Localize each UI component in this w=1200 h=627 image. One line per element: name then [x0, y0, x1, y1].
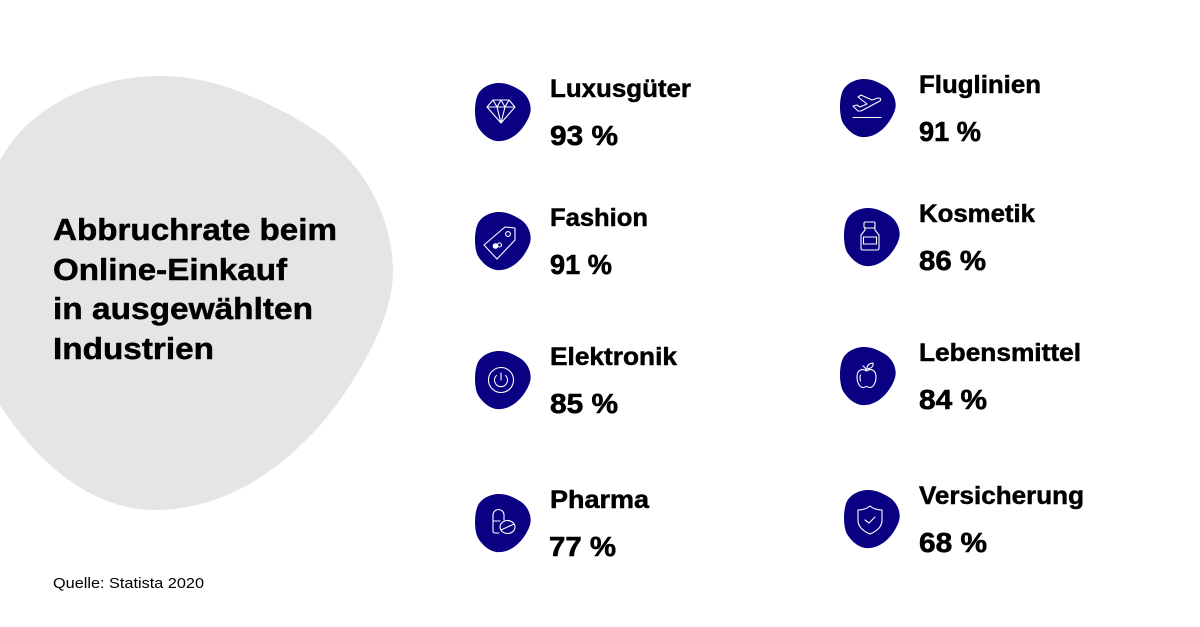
- item: Elektronik: 85 %: [550, 388, 618, 419]
- item: Pharma: Pharma: [550, 486, 650, 514]
- title: Industrien: [53, 331, 214, 366]
- item: Luxusgüter: [475, 75, 691, 151]
- icon: power button: [475, 351, 531, 409]
- item: Versicherung: Versicherung: [919, 482, 1084, 510]
- item: Luxusgüter: 93 %: [550, 120, 618, 151]
- item: Versicherung: [844, 482, 1084, 558]
- icon: apple: [840, 347, 896, 405]
- item: Lebensmittel: 84 %: [919, 384, 987, 415]
- title: in ausgewählten: [53, 291, 313, 326]
- item: Fashion: 91 %: [550, 249, 612, 280]
- title: [53, 212, 337, 366]
- title: Online-Einkauf: [53, 252, 288, 287]
- background blob: [0, 76, 393, 510]
- item: Luxusgüter: Luxusgüter: [550, 75, 691, 103]
- item: Kosmetik: 86 %: [919, 245, 986, 276]
- item: Elektronik: [475, 343, 677, 419]
- item: Lebensmittel: [840, 339, 1081, 415]
- item: Fluglinien: 91 %: [919, 116, 981, 147]
- title: Abbruchrate beim: [53, 212, 337, 247]
- item: Kosmetik: [844, 200, 1035, 276]
- item: Fashion: Fashion: [550, 204, 648, 232]
- icon: price tag: [475, 212, 531, 270]
- item: Pharma: 77 %: [549, 531, 616, 562]
- source note: Quelle: Statista 2020: [53, 575, 204, 592]
- item: Kosmetik: Kosmetik: [919, 200, 1035, 228]
- item: Versicherung: 68 %: [919, 527, 987, 558]
- icon: shield: [844, 490, 900, 548]
- icon: departing plane: [840, 79, 896, 137]
- item: Fluglinien: Fluglinien: [919, 71, 1041, 99]
- icon: pills: [475, 494, 531, 552]
- item: Pharma: [475, 486, 650, 562]
- icon: diamond: [475, 83, 531, 141]
- icon: cosmetic bottle: [844, 208, 900, 266]
- item: Lebensmittel: Lebensmittel: [919, 339, 1081, 367]
- item: Fashion: [475, 204, 648, 280]
- item: Elektronik: Elektronik: [550, 343, 677, 371]
- item: Fluglinien: [840, 71, 1041, 147]
